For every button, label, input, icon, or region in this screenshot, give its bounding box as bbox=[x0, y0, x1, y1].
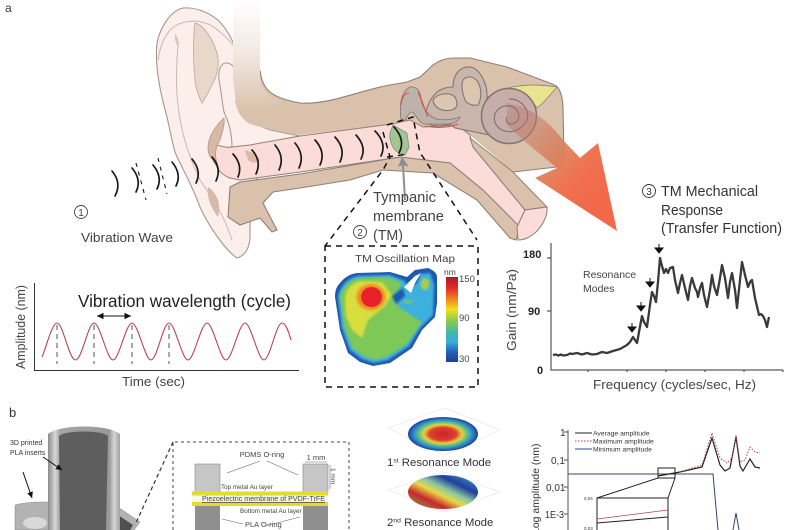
head column bbox=[233, 0, 282, 124]
inset plot bbox=[584, 496, 668, 530]
label tympanic membrane bbox=[373, 189, 444, 244]
insert label bbox=[10, 440, 46, 457]
label tympanic membrane: membrane bbox=[373, 208, 444, 225]
pinna bbox=[156, 8, 280, 258]
insert label: 3D printed bbox=[10, 440, 42, 447]
axes bbox=[34, 283, 299, 370]
zoom connectors bbox=[597, 478, 675, 498]
antihelix line bbox=[176, 45, 232, 240]
label tympanic membrane: (TM) bbox=[373, 227, 403, 244]
map title: TM Oscillation Map bbox=[355, 253, 455, 265]
mode 2 label: Resonance Mode bbox=[401, 517, 493, 529]
x label: Time (sec) bbox=[122, 374, 185, 389]
y tick labels: 1E-3 bbox=[545, 510, 564, 521]
axes bbox=[547, 243, 783, 372]
pointer arrow to membrane bbox=[398, 157, 409, 200]
zoom box bbox=[658, 468, 675, 478]
label mechanical response: Response bbox=[661, 203, 723, 219]
top o-rings bbox=[195, 464, 328, 492]
resonance label bbox=[583, 269, 636, 295]
cylinder bore bbox=[59, 432, 108, 530]
scaphoid fossa bbox=[194, 23, 218, 103]
legend: Minimum amplitude bbox=[593, 446, 652, 454]
resonance mode 1 bbox=[387, 408, 500, 469]
panel label b: b bbox=[9, 405, 16, 420]
label mechanical response bbox=[661, 184, 782, 237]
color scale: 150 bbox=[459, 274, 475, 285]
average curve bbox=[658, 437, 760, 476]
y label: Amplitude (nm) bbox=[14, 285, 28, 369]
tube tip bbox=[517, 207, 547, 240]
mode 1 label: 1 bbox=[387, 457, 393, 469]
head outline bbox=[260, 58, 564, 172]
tick 90: 90 bbox=[528, 306, 540, 318]
x label: Frequency (cycles/sec, Hz) bbox=[593, 377, 756, 392]
cochlea bbox=[482, 88, 536, 144]
panel label a: a bbox=[5, 1, 12, 15]
resonance label: Resonance bbox=[583, 269, 636, 281]
y label: Gain (nm/Pa) bbox=[504, 269, 519, 351]
helix rim bbox=[158, 21, 236, 60]
layer labels: 1 mm bbox=[307, 453, 325, 462]
step 2 badge bbox=[354, 226, 366, 239]
y tick labels: 180 bbox=[523, 249, 541, 261]
color scale: nm bbox=[444, 267, 456, 277]
legend: Maximum amplitude bbox=[593, 438, 654, 446]
lobe spot bbox=[208, 187, 219, 217]
panel: sensor layer cross-section bbox=[173, 442, 349, 530]
ear canal and middle ear bbox=[209, 120, 525, 227]
canal spot bbox=[245, 150, 260, 163]
wavelength arrow bbox=[97, 315, 131, 317]
axes bbox=[564, 430, 568, 530]
ossicles bbox=[400, 87, 460, 124]
color scale: 90 bbox=[459, 313, 470, 324]
3D printed model bbox=[10, 426, 140, 530]
cylinder bbox=[48, 426, 120, 530]
layer labels: Top metal Au layer bbox=[221, 484, 273, 491]
metal and membrane layers bbox=[192, 492, 328, 506]
orange arrow to transfer function bbox=[507, 103, 617, 231]
y tick labels: 1 bbox=[560, 428, 566, 439]
label mechanical response: TM Mechanical bbox=[661, 184, 758, 200]
sine curve bbox=[42, 323, 291, 360]
maximum curve bbox=[680, 433, 760, 472]
label tympanic membrane: Tympanic bbox=[373, 189, 436, 206]
resonance mode 2 bbox=[387, 472, 500, 529]
step 3 badge: 3 bbox=[646, 187, 652, 198]
upper tissue and head bbox=[236, 58, 564, 172]
dashed frame bbox=[325, 246, 478, 387]
oscillation blob bbox=[335, 268, 437, 366]
base cavity bbox=[23, 517, 47, 529]
chart: gain transfer function bbox=[504, 243, 783, 392]
semicircular canals bbox=[425, 67, 490, 135]
insert label: PLA inserts bbox=[10, 450, 46, 457]
legend: Average amplitude bbox=[593, 430, 650, 438]
dashed frame bbox=[173, 442, 349, 530]
layer labels bbox=[202, 450, 336, 529]
step 1 badge: 1 bbox=[78, 208, 84, 219]
step 3 badge bbox=[642, 184, 656, 198]
y tick labels: 0,1 bbox=[551, 456, 565, 467]
helix sliver bbox=[175, 33, 179, 48]
tick 0: 0 bbox=[537, 365, 543, 377]
tympanic membrane bbox=[390, 125, 409, 155]
inset plot: 0,04 bbox=[584, 496, 593, 501]
chart: vibration sine wave bbox=[14, 283, 299, 389]
layer labels: 1 mm bbox=[329, 468, 336, 484]
mode 1 label: Resonance Mode bbox=[399, 457, 491, 469]
vibration wave arcs bbox=[112, 127, 402, 196]
color scale bbox=[444, 267, 475, 365]
legend bbox=[575, 430, 654, 454]
base bbox=[15, 502, 140, 530]
leader lines bbox=[222, 461, 330, 526]
wavelength label: Vibration wavelength (cycle) bbox=[78, 291, 291, 311]
lower tissue bbox=[228, 157, 520, 240]
step 1 badge bbox=[74, 206, 88, 219]
color scale: 30 bbox=[459, 354, 470, 365]
illustration: ear anatomy bbox=[156, 0, 564, 258]
layer labels: Piezoelectric membrane of PVDF-TrFE bbox=[202, 494, 325, 503]
conchal bowl bbox=[219, 63, 300, 148]
step 2 badge: 2 bbox=[357, 228, 363, 239]
mode 2 label: 2 bbox=[387, 517, 393, 529]
tube wall bbox=[470, 138, 547, 210]
yellow nerve bbox=[487, 85, 557, 108]
peak dashed markers bbox=[57, 325, 169, 364]
mode 2 label: nd bbox=[393, 518, 401, 524]
layer labels: Bottom metal Au layer bbox=[240, 508, 302, 515]
minimum curve bbox=[568, 474, 739, 530]
layer labels: PDMS O-ring bbox=[240, 450, 284, 459]
ossicle red membrane bbox=[401, 92, 458, 127]
chart: log amplitude bbox=[530, 428, 760, 530]
mode 1 label: st bbox=[393, 458, 399, 464]
y tick labels: 0,01 bbox=[546, 483, 566, 494]
base step bbox=[115, 513, 133, 530]
label vibration wave: Vibration Wave bbox=[81, 230, 173, 245]
label mechanical response: (Transfer Function) bbox=[661, 221, 782, 237]
y tick labels bbox=[545, 428, 566, 521]
dashed zoom lines bbox=[325, 117, 477, 246]
resonance label: Modes bbox=[583, 283, 615, 295]
response curve bbox=[553, 258, 769, 356]
dashed connector bbox=[135, 442, 173, 525]
leader arrows bbox=[23, 457, 62, 498]
resonance arrows bbox=[628, 244, 663, 332]
panel: TM oscillation map bbox=[325, 246, 478, 387]
wave dashed marks bbox=[136, 158, 167, 200]
bottom o-rings bbox=[195, 505, 328, 530]
tragus bbox=[208, 118, 224, 163]
layer labels: PLA O-ring bbox=[245, 520, 282, 529]
